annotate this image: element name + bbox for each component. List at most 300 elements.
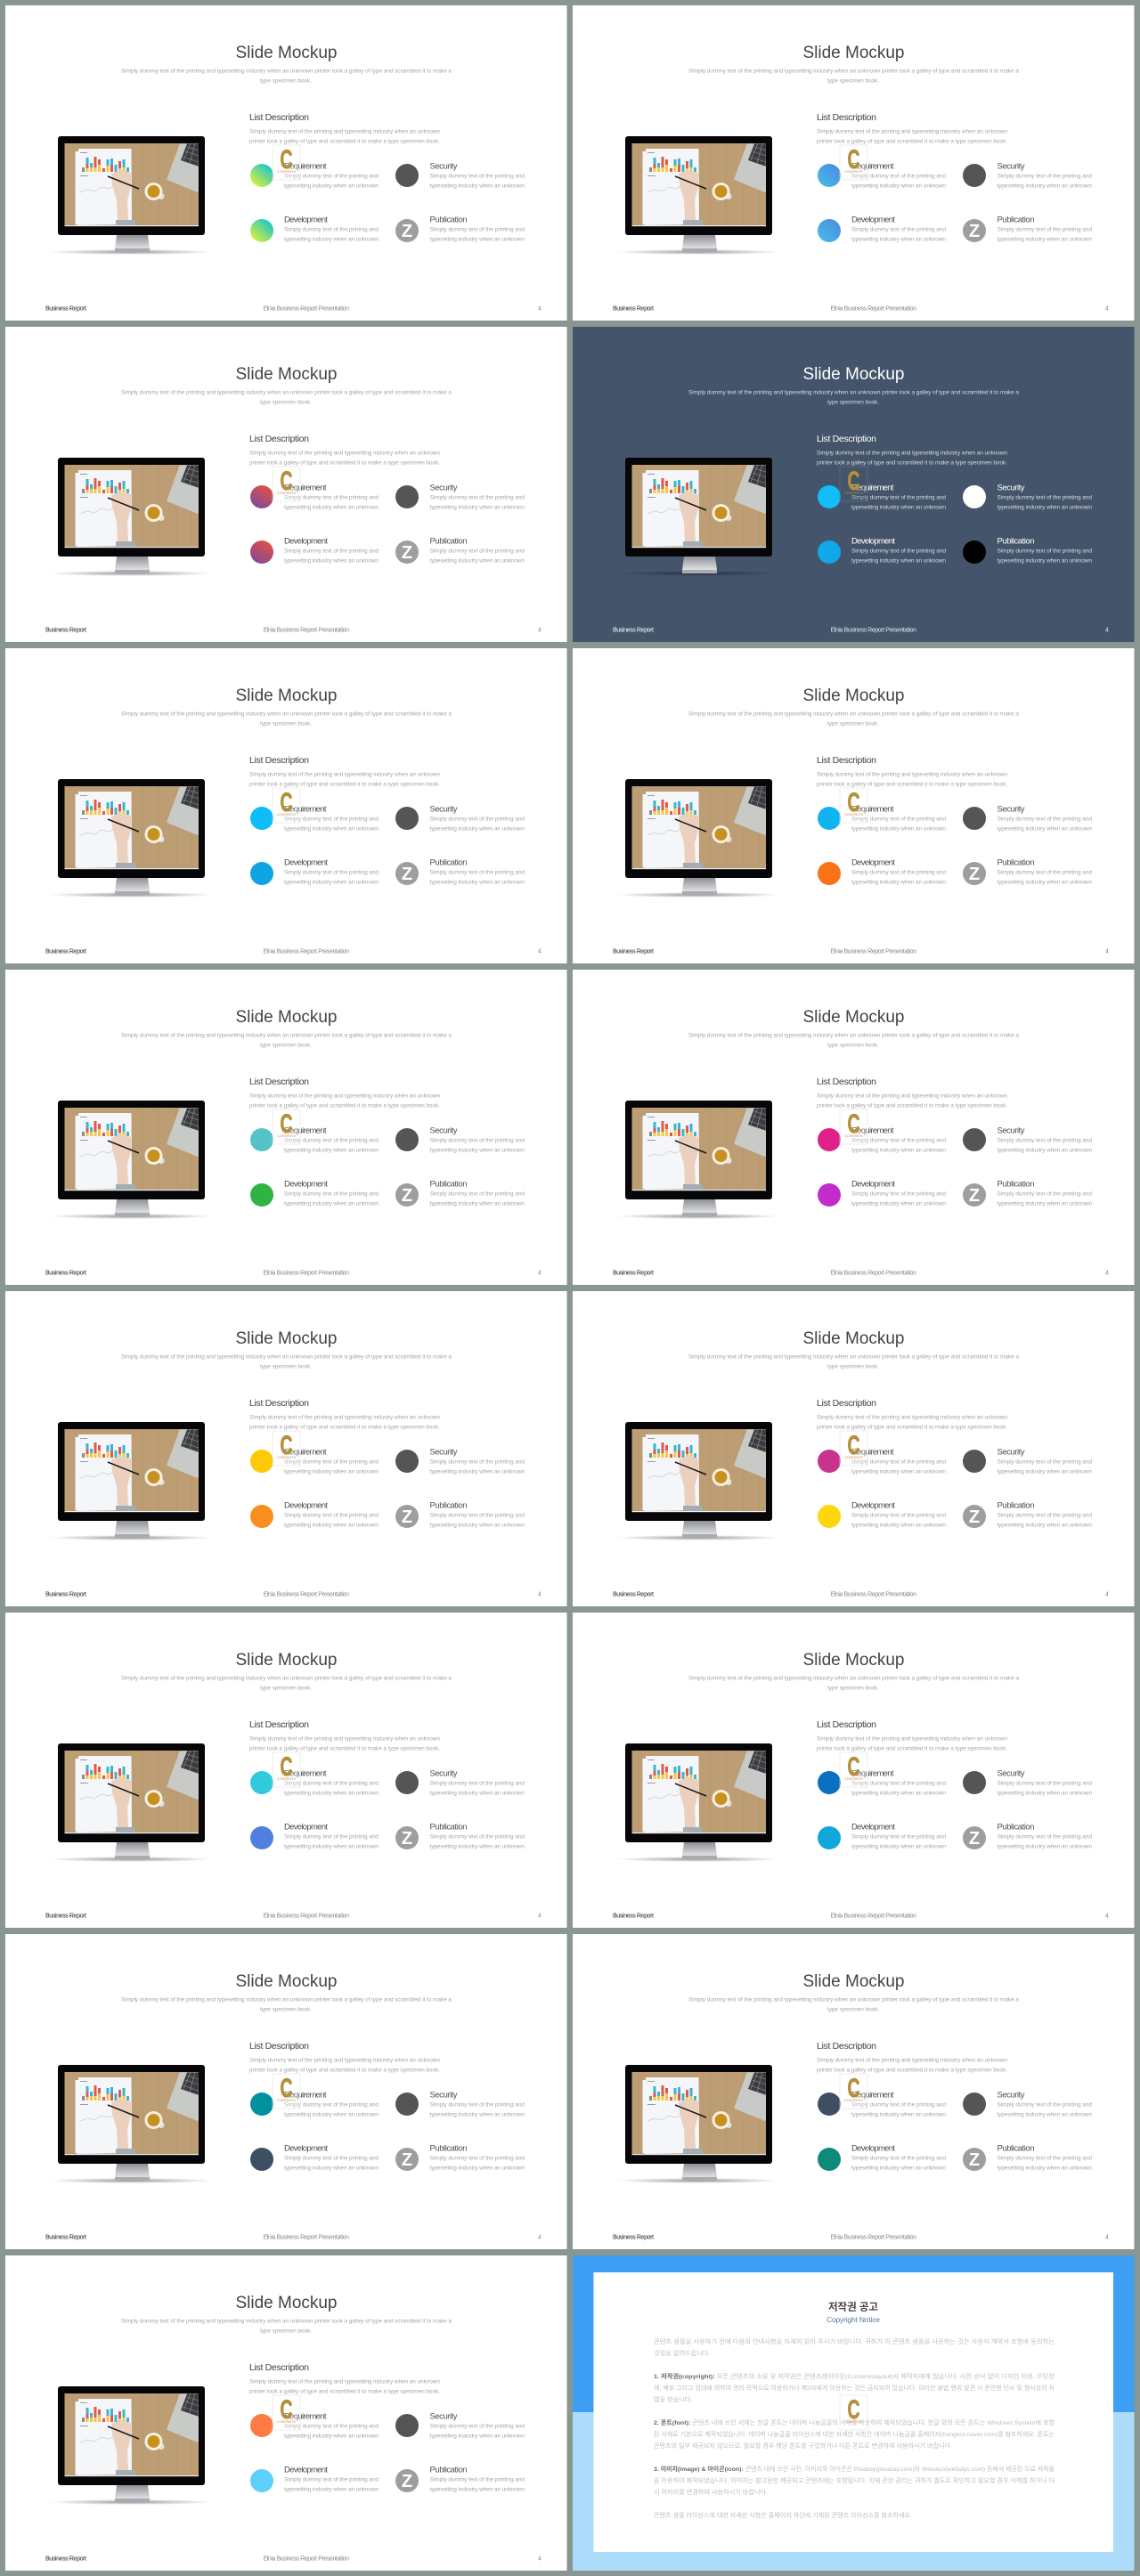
list heading: List Description [249, 2041, 309, 2052]
list items: typesetting industry when an unknown [429, 504, 525, 511]
logo watermark: C [848, 1752, 860, 1782]
list items: Simply dummy text of the printing and [429, 1781, 525, 1786]
footer: Elnia Business Report Presentation [830, 949, 916, 955]
list text [249, 128, 440, 144]
list items: Simply dummy text of the printing and [851, 1191, 946, 1197]
monitor mockup [615, 2065, 781, 2183]
title: Slide Mockup [235, 687, 337, 705]
list text: printer took a galley of type and scrambled it to make a type specimen book. [249, 139, 440, 144]
subtitle: Simply dummy text of the printing and typesetting industry when an unknown printer took a galley of type and scrambled it to make a [121, 711, 452, 718]
footer: Business Report [613, 2235, 654, 2240]
list items: typesetting industry when an unknown [998, 2166, 1092, 2171]
list text: Simply dummy text of the printing and typesetting industry when an unknown [249, 1414, 440, 1421]
copyright slide [573, 2255, 1135, 2571]
list text: printer took a galley of type and scrambled it to make a type specimen book. [249, 1745, 440, 1752]
circle icons: Z [402, 2150, 412, 2170]
footer: Elnia Business Report Presentation [264, 306, 349, 312]
list text: Simply dummy text of the printing and typesetting industry when an unknown [249, 451, 440, 456]
list items: Development [284, 215, 328, 224]
list items: typesetting industry when an unknown [998, 237, 1092, 242]
list items: typesetting industry when an unknown [429, 1200, 525, 1207]
list items: Security [429, 2411, 458, 2422]
list items: Simply dummy text of the printing and [998, 1138, 1092, 1143]
list items: Security [998, 1125, 1025, 1136]
circle icons [818, 2092, 986, 2171]
logo watermark: C [848, 788, 860, 817]
copyright body text [654, 2337, 1054, 2519]
copyright body text: 시 이미지를 변경하여 사용하시기 바랍니다. [654, 2488, 768, 2496]
logo watermark [840, 2074, 867, 2109]
monitor mockup [48, 1422, 214, 1540]
monitor mockup [615, 1101, 781, 1219]
footer: 4 [538, 306, 542, 312]
list items: Development [284, 858, 328, 867]
circle icons [250, 807, 419, 885]
list items: typesetting industry when an unknown [998, 1147, 1092, 1154]
list items: Simply dummy text of the printing and [851, 2101, 946, 2109]
footer: 4 [1105, 949, 1109, 955]
list items: Requirement [284, 2411, 327, 2422]
list items: typesetting industry when an unknown [851, 504, 946, 511]
list items: Development [284, 1822, 328, 1832]
list items: typesetting industry when an unknown [998, 557, 1092, 565]
list items: Simply dummy text of the printing and [998, 549, 1092, 554]
list items: Development [284, 1501, 328, 1510]
list text [817, 451, 1007, 467]
list items: Publication [429, 2144, 467, 2153]
list items: Publication [998, 2144, 1035, 2153]
list items: typesetting industry when an unknown [851, 880, 946, 885]
logo watermark [273, 788, 300, 823]
circle icons: Z [402, 865, 412, 884]
list text: printer took a galley of type and scrambled it to make a type specimen book. [249, 782, 440, 787]
list items: Simply dummy text of the printing and [998, 2155, 1092, 2162]
list items: Requirement [851, 483, 894, 493]
footer: Elnia Business Report Presentation [264, 627, 349, 634]
subtitle: Simply dummy text of the printing and typesetting industry when an unknown printer took a galley of type and scrambled it to make a [121, 1676, 452, 1681]
list text [817, 771, 1007, 787]
footer [613, 1592, 1109, 1597]
list items: typesetting industry when an unknown [284, 1147, 379, 1154]
circle icons [250, 1128, 419, 1207]
circle icons [818, 1128, 986, 1207]
list items: typesetting industry when an unknown [429, 1523, 525, 1528]
circle icons: Z [402, 1186, 412, 1206]
footer: Business Report [45, 1270, 86, 1277]
subtitle [121, 390, 452, 406]
circle icons: Z [969, 1186, 980, 1206]
subtitle: Simply dummy text of the printing and typesetting industry when an unknown printer took a galley of type and scrambled it to make a [121, 1033, 452, 1038]
logo watermark: CONTENTS [277, 1455, 296, 1459]
list items: Requirement [284, 805, 327, 814]
circle icons [818, 164, 986, 242]
list items: Development [284, 2465, 328, 2475]
list text [817, 2057, 1007, 2073]
list text: Simply dummy text of the printing and typesetting industry when an unknown [817, 128, 1007, 135]
circle icons: Z [402, 222, 412, 241]
list items: Simply dummy text of the printing and [284, 2477, 379, 2483]
subtitle: type specimen book. [260, 1042, 312, 1049]
slide 12 [573, 1613, 1135, 1928]
list items: typesetting industry when an unknown [284, 557, 379, 565]
list items: Security [429, 483, 458, 493]
footer [45, 1270, 542, 1277]
list items: Simply dummy text of the printing and [851, 1138, 946, 1143]
list heading: List Description [249, 1077, 309, 1087]
title: Slide Mockup [803, 1972, 905, 1991]
list items: Simply dummy text of the printing and [851, 1834, 946, 1840]
footer: Elnia Business Report Presentation [830, 306, 916, 312]
list items: Simply dummy text of the printing and [284, 2155, 379, 2162]
copyright body text: 것임을 알려드립니다. [654, 2349, 711, 2357]
list text [817, 128, 1007, 144]
list heading: List Description [817, 1398, 876, 1409]
list items: typesetting industry when an unknown [998, 1469, 1092, 1475]
list text [249, 2057, 440, 2073]
list items: Publication [429, 536, 467, 547]
subtitle: Simply dummy text of the printing and typesetting industry when an unknown printer took a galley of type and scrambled it to make a [121, 68, 452, 75]
circle icons: Z [402, 1507, 412, 1527]
title: Slide Mockup [803, 1008, 905, 1027]
list items: Development [851, 215, 895, 224]
list items: Publication [429, 858, 467, 867]
list items: typesetting industry when an unknown [998, 1843, 1092, 1850]
slide 6 [573, 648, 1135, 963]
list items: Simply dummy text of the printing and [429, 1138, 525, 1143]
list items: Publication [998, 858, 1035, 867]
list items: Security [998, 1448, 1025, 1457]
list text: printer took a galley of type and scrambled it to make a type specimen book. [817, 1745, 1007, 1752]
list items: Security [429, 1125, 458, 1136]
subtitle [121, 68, 452, 84]
list items: Development [284, 536, 328, 547]
list heading: List Description [817, 434, 876, 444]
logo watermark [273, 1752, 300, 1787]
list items: Simply dummy text of the printing and [284, 173, 379, 180]
list items: Simply dummy text of the printing and [429, 2101, 525, 2109]
monitor mockup [48, 779, 214, 898]
list items: Security [998, 2091, 1025, 2100]
title: Slide Mockup [803, 1329, 905, 1348]
list items: Simply dummy text of the printing and [284, 1781, 379, 1786]
slide 5 [5, 648, 566, 963]
footer [45, 627, 542, 634]
subtitle: Simply dummy text of the printing and typesetting industry when an unknown printer took a galley of type and scrambled it to make a [121, 390, 452, 395]
list items: typesetting industry when an unknown [998, 183, 1092, 189]
list items: typesetting industry when an unknown [429, 2166, 525, 2171]
slide 13 [5, 1934, 566, 2249]
list text [817, 1414, 1007, 1430]
list items: typesetting industry when an unknown [284, 1523, 379, 1528]
circle icons [250, 1771, 419, 1849]
list items: typesetting industry when an unknown [284, 880, 379, 885]
list items: Simply dummy text of the printing and [284, 869, 379, 876]
list items: Simply dummy text of the printing and [998, 226, 1092, 233]
list items: Development [851, 536, 895, 547]
footer [45, 2556, 542, 2563]
copyright body text: 된 서체로 기본으로 제작되었습니다. 네이버 나눔글꼴 라이선스에 대한 자세한 사항은 네이버 나눔글꼴 홈페이지(hangeul.naver.com)를 참조하세요. 폰트는 [654, 2430, 1054, 2438]
subtitle [121, 711, 452, 727]
circle icons [250, 164, 419, 242]
footer: 4 [1105, 2235, 1109, 2240]
list text: printer took a galley of type and scrambled it to make a type specimen book. [817, 1102, 1007, 1109]
list items: typesetting industry when an unknown [851, 1790, 946, 1797]
list items: Simply dummy text of the printing and [429, 1191, 525, 1197]
list text: printer took a galley of type and scrambled it to make a type specimen book. [817, 459, 1007, 467]
list items: typesetting industry when an unknown [429, 880, 525, 885]
list items [284, 162, 525, 242]
footer [613, 1913, 1109, 1920]
list items: Simply dummy text of the printing and [998, 1781, 1092, 1786]
footer [613, 949, 1109, 955]
title: Slide Mockup [235, 44, 337, 62]
footer: Elnia Business Report Presentation [264, 949, 349, 955]
list items: typesetting industry when an unknown [998, 826, 1092, 832]
list items: Security [429, 1448, 458, 1457]
circle icons [250, 2092, 419, 2171]
list text: Simply dummy text of the printing and typesetting industry when an unknown [817, 1093, 1007, 1099]
list items: Requirement [851, 1448, 894, 1457]
list items: typesetting industry when an unknown [429, 183, 525, 189]
footer: 4 [1105, 627, 1109, 634]
title: Slide Mockup [235, 2294, 337, 2312]
list items: Simply dummy text of the printing and [284, 1459, 379, 1466]
subtitle: Simply dummy text of the printing and typesetting industry when an unknown printer took a galley of type and scrambled it to make a [688, 1676, 1019, 1681]
list text [249, 1414, 440, 1430]
logo watermark [840, 467, 867, 501]
footer: 4 [538, 1270, 542, 1277]
list items: Development [284, 2144, 328, 2153]
subtitle [121, 1996, 452, 2012]
subtitle [121, 1033, 452, 1049]
list items [851, 2091, 1092, 2171]
list items: Simply dummy text of the printing and [429, 1459, 525, 1466]
footer: Elnia Business Report Presentation [264, 1270, 349, 1277]
logo watermark [273, 467, 300, 501]
list items: typesetting industry when an unknown [429, 1147, 525, 1154]
list text: Simply dummy text of the printing and typesetting industry when an unknown [249, 2057, 440, 2064]
list items: Development [851, 1501, 895, 1510]
list heading: List Description [817, 1077, 876, 1087]
footer: Business Report [45, 1913, 86, 1920]
circle icons [250, 1450, 419, 1528]
list items: typesetting industry when an unknown [429, 1790, 525, 1797]
copyright subtitle: Copyright Notice [826, 2315, 880, 2324]
list items [284, 1125, 525, 1207]
list heading: List Description [817, 112, 876, 123]
list heading: List Description [249, 755, 309, 766]
title: Slide Mockup [803, 687, 905, 705]
circle icons [818, 1450, 986, 1528]
list items: Simply dummy text of the printing and [851, 549, 946, 554]
list items: typesetting industry when an unknown [998, 1790, 1092, 1797]
subtitle [121, 1353, 452, 1369]
list items: typesetting industry when an unknown [851, 826, 946, 832]
list items: Simply dummy text of the printing and [998, 1459, 1092, 1466]
list items: Development [284, 1179, 328, 1190]
list items: Security [998, 483, 1025, 493]
list items: typesetting industry when an unknown [429, 2112, 525, 2117]
list items: Development [851, 2144, 895, 2153]
list items: Simply dummy text of the printing and [429, 495, 525, 500]
circle icons [250, 485, 419, 564]
footer: Business Report [613, 1913, 654, 1920]
list text: printer took a galley of type and scrambled it to make a type specimen book. [817, 2068, 1007, 2073]
list items [284, 805, 525, 885]
list text [249, 771, 440, 787]
list items: typesetting industry when an unknown [284, 2486, 379, 2493]
subtitle [688, 1353, 1019, 1369]
list text: Simply dummy text of the printing and typesetting industry when an unknown [817, 1414, 1007, 1421]
title: Slide Mockup [235, 365, 337, 384]
footer: Elnia Business Report Presentation [264, 1913, 349, 1920]
logo watermark [273, 2395, 300, 2430]
logo watermark: C [280, 2395, 292, 2425]
footer [613, 627, 1109, 634]
list heading: List Description [817, 1719, 876, 1730]
footer: Elnia Business Report Presentation [830, 2235, 916, 2240]
subtitle [688, 390, 1019, 406]
circle icons [250, 2414, 419, 2492]
list items: typesetting industry when an unknown [284, 504, 379, 511]
list items: Publication [998, 1179, 1035, 1190]
logo watermark [273, 2074, 300, 2109]
list items: Simply dummy text of the printing and [851, 173, 946, 180]
list text: printer took a galley of type and scrambled it to make a type specimen book. [817, 1425, 1007, 1430]
footer [45, 306, 542, 312]
subtitle: type specimen book. [827, 1685, 879, 1692]
list heading: List Description [249, 1398, 309, 1409]
circle icons: Z [402, 1829, 412, 1849]
footer: Business Report [613, 627, 654, 634]
list text: Simply dummy text of the printing and typesetting industry when an unknown [249, 2379, 440, 2385]
monitor mockup [48, 458, 214, 576]
list items: Security [429, 1768, 458, 1779]
list items: Simply dummy text of the printing and [429, 2424, 525, 2429]
list items: Simply dummy text of the printing and [429, 2477, 525, 2483]
subtitle [688, 68, 1019, 84]
list items: Simply dummy text of the printing and [429, 173, 525, 180]
list items: typesetting industry when an unknown [284, 2166, 379, 2171]
list items: Simply dummy text of the printing and [998, 1512, 1092, 1519]
list items: typesetting industry when an unknown [851, 557, 946, 565]
logo watermark: C [280, 1752, 292, 1782]
list items: typesetting industry when an unknown [284, 2112, 379, 2117]
list items [851, 483, 1092, 565]
list items: Security [998, 162, 1025, 171]
monitor mockup [615, 136, 781, 255]
footer: Elnia Business Report Presentation [264, 1592, 349, 1597]
copyright title: 저작권 공고 [828, 2301, 878, 2313]
list items: Simply dummy text of the printing and [284, 2424, 379, 2429]
list items: Publication [998, 1822, 1035, 1832]
list text: Simply dummy text of the printing and typesetting industry when an unknown [249, 1736, 440, 1742]
monitor mockup [615, 1422, 781, 1540]
subtitle: Simply dummy text of the printing and typesetting industry when an unknown printer took a galley of type and scrambled it to make a [688, 711, 1019, 718]
logo watermark: C [280, 788, 292, 817]
list items: Simply dummy text of the printing and [284, 1512, 379, 1519]
list items: Simply dummy text of the printing and [851, 869, 946, 876]
list items: Publication [429, 2465, 467, 2475]
circle icons [818, 1771, 986, 1849]
footer: Business Report [613, 306, 654, 312]
list items: typesetting industry when an unknown [998, 2112, 1092, 2117]
subtitle: Simply dummy text of the printing and typesetting industry when an unknown printer took a galley of type and scrambled it to make a [688, 1033, 1019, 1038]
subtitle: Simply dummy text of the printing and typesetting industry when an unknown printer took a galley of type and scrambled it to make a [688, 68, 1019, 75]
list items: typesetting industry when an unknown [851, 183, 946, 189]
copyright body text: 벌을 받습니다. [654, 2395, 693, 2403]
circle icons: Z [969, 1829, 980, 1849]
subtitle: Simply dummy text of the printing and typesetting industry when an unknown printer took a galley of type and scrambled it to make a [688, 1353, 1019, 1361]
subtitle: type specimen book. [827, 721, 879, 727]
footer [45, 2235, 542, 2240]
list items: Publication [998, 215, 1035, 224]
list items: Simply dummy text of the printing and [429, 2155, 525, 2162]
list items: Simply dummy text of the printing and [284, 226, 379, 233]
logo watermark [840, 1752, 867, 1787]
list items: typesetting industry when an unknown [429, 2486, 525, 2493]
monitor mockup [48, 1743, 214, 1862]
logo watermark [273, 1431, 300, 1466]
circle icons: Z [969, 2150, 980, 2170]
circle icons: Z [969, 865, 980, 884]
list items: Simply dummy text of the printing and [851, 1512, 946, 1519]
list items [284, 1768, 525, 1850]
list items: typesetting industry when an unknown [284, 1843, 379, 1850]
list text [817, 1736, 1007, 1752]
logo watermark: CONTENTS [277, 2419, 296, 2424]
list items: Simply dummy text of the printing and [429, 549, 525, 554]
list items: typesetting industry when an unknown [851, 1843, 946, 1850]
copyright body text: 1. 저작권(copyright): 모든 콘텐츠의 소유 및 저작권은 콘텐츠레이아웃(Contentslayout)사 제작자에게 있습니다. 사전 승낙 없이 디자인 이용, 무단전 [654, 2372, 1054, 2380]
logo watermark: CONTENTS [277, 2098, 296, 2102]
list text: Simply dummy text of the printing and typesetting industry when an unknown [817, 2057, 1007, 2064]
monitor mockup [48, 2386, 214, 2505]
footer: 4 [538, 2556, 542, 2563]
list text: Simply dummy text of the printing and typesetting industry when an unknown [817, 451, 1007, 456]
list items [284, 483, 525, 565]
footer: Elnia Business Report Presentation [830, 1270, 916, 1277]
logo watermark: C [280, 145, 292, 175]
logo watermark: CONTENTS [844, 169, 863, 174]
subtitle: type specimen book. [827, 1364, 879, 1369]
logo watermark [273, 145, 300, 180]
logo watermark: CONTENTS [277, 1776, 296, 1781]
logo watermark: CONTENTS [844, 1134, 863, 1138]
list items: Simply dummy text of the printing and [998, 816, 1092, 823]
circle icons: Z [402, 543, 412, 563]
list items: typesetting industry when an unknown [851, 237, 946, 242]
list items: typesetting industry when an unknown [429, 237, 525, 242]
list items: typesetting industry when an unknown [851, 2112, 946, 2117]
list items: Simply dummy text of the printing and [998, 869, 1092, 876]
subtitle [688, 711, 1019, 727]
subtitle [121, 2319, 452, 2335]
copyright body text: 콘텐츠 샘플을 사용하기 전에 다음의 안내사항을 자세히 읽어 주시기 바랍니다. 귀하가 이 콘텐츠 샘플을 사용하는 것은 사용자 계약서 조항에 동의하는 [654, 2337, 1054, 2345]
list items: Publication [998, 1501, 1035, 1510]
list items: Security [998, 1768, 1025, 1779]
circle icons [818, 807, 986, 885]
subtitle: Simply dummy text of the printing and typesetting industry when an unknown printer took a galley of type and scrambled it to make a [688, 390, 1019, 395]
circle icons [818, 485, 986, 564]
monitor mockup [48, 2065, 214, 2183]
list items: Simply dummy text of the printing and [284, 1138, 379, 1143]
footer: Business Report [45, 2235, 86, 2240]
logo watermark: CONTENTS [844, 812, 863, 817]
logo watermark: CONTENTS [277, 1134, 296, 1138]
list items: typesetting industry when an unknown [284, 1790, 379, 1797]
list items: Requirement [284, 2091, 327, 2100]
